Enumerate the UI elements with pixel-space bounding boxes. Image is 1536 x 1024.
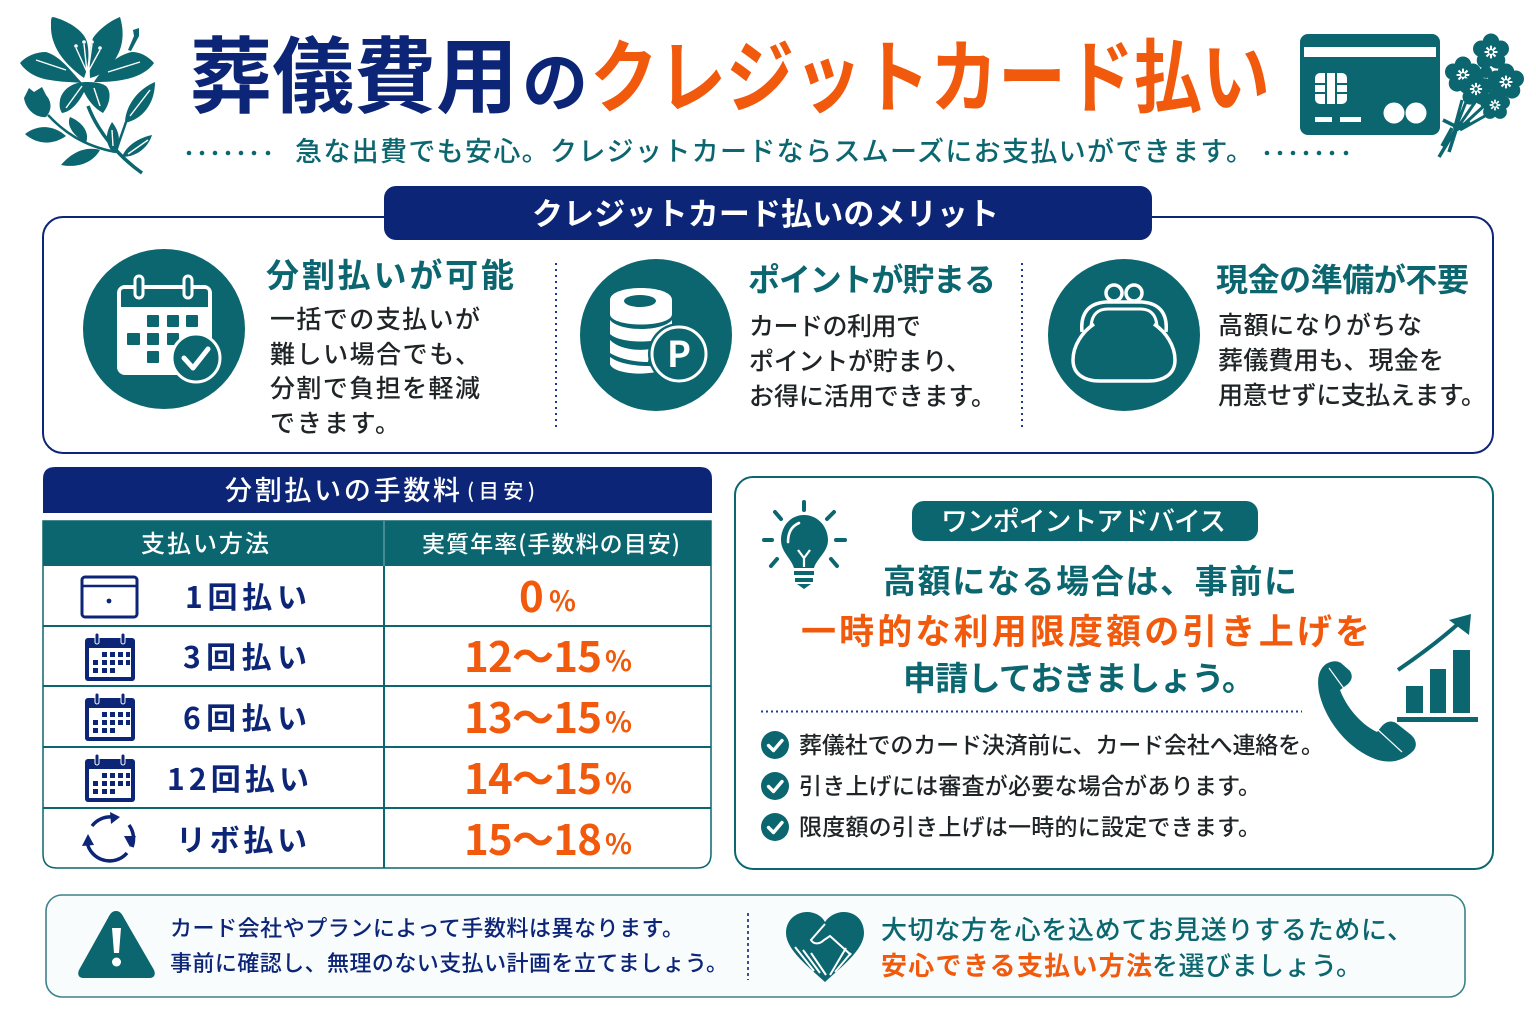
icon: coin purse <box>1048 259 1200 411</box>
text: no cash merit: 葬儀費用も、現金を <box>1218 341 1444 377</box>
text: points merit: カードの利用で <box>749 307 921 343</box>
row: revolving: 15～18 <box>464 807 602 868</box>
text: no cash merit: 用意せずに支払えます。 <box>1218 376 1486 412</box>
text: advice headline: 一時的な利用限度額の引き上げを <box>801 604 1370 655</box>
row: 12 payments: 14～15 <box>464 746 602 807</box>
row: revolving: % <box>605 823 632 863</box>
row: revolving <box>82 807 632 868</box>
checklist <box>761 726 1324 842</box>
text: closing message: を選びましょう。 <box>1152 946 1362 983</box>
row: 6 payments: 13～15 <box>464 685 602 746</box>
text: points merit: ポイントが貯まり、 <box>749 342 971 378</box>
row: 3 payments: % <box>605 640 632 680</box>
title: クレジットカード払い <box>590 14 1270 130</box>
text: points merit <box>748 255 996 413</box>
subtitle: 急な出費でも安心。クレジットカードならスムーズにお支払いができます。 <box>295 130 1253 169</box>
row: 1 payment: 0 <box>519 564 544 625</box>
text: fee note: 事前に確認し、無理のない支払い計画を立てましょう。 <box>170 946 728 978</box>
text: no cash merit <box>1216 255 1486 412</box>
row: 6 payments: % <box>605 701 632 741</box>
row: 6 payments <box>85 685 632 746</box>
text: advice headline: 申請しておきましょう。 <box>903 652 1255 700</box>
row: 12 payments: 12回払い <box>167 755 309 799</box>
icon: lily flower <box>20 17 155 173</box>
text: no cash merit: 高額になりがちな <box>1218 306 1422 342</box>
icon: light bulb <box>764 502 845 589</box>
text: installment merit: 分割払いが可能 <box>266 249 514 297</box>
text: installment merit <box>266 249 514 440</box>
row: 6 payments: 6回払い <box>183 694 307 738</box>
icon: bouquet <box>1439 33 1524 157</box>
checklist: 引き上げには審査が必要な場合があります。 <box>799 767 1261 801</box>
checklist: 限度額の引き上げは一時的に設定できます。 <box>799 808 1261 842</box>
heading: merits <box>384 186 1152 240</box>
text: installment merit: 分割で負担を軽減 <box>270 369 480 405</box>
text: closing message: 大切な方を心を込めてお見送りするために、 <box>881 910 1413 947</box>
icon: heart handshake <box>786 912 864 982</box>
panel: merits <box>43 186 1493 453</box>
row: 1 payment: 1回払い <box>185 573 307 617</box>
icon: phone and rising chart <box>1318 614 1478 762</box>
table header labels <box>141 524 680 559</box>
text: closing message: 安心できる支払い方法 <box>881 946 1152 983</box>
checklist: 葬儀社でのカード決済前に、カード会社へ連絡を。 <box>799 726 1324 760</box>
row: 12 payments: % <box>605 762 632 802</box>
text: closing message <box>881 910 1413 983</box>
title: 葬儀費用 <box>190 10 518 130</box>
text: installment merit: できます。 <box>270 404 400 440</box>
title <box>190 10 1270 130</box>
icon: warning triangle <box>78 911 155 978</box>
row: 3 payments <box>85 624 632 685</box>
row: revolving: リボ払い <box>176 816 307 860</box>
heading: fee table <box>43 467 712 513</box>
text: fee note: カード会社やプランによって手数料は異なります。 <box>170 911 684 943</box>
text: installment merit: 難しい場合でも、 <box>270 335 480 371</box>
panel: bottom notes <box>46 895 1465 997</box>
text: advice headline <box>801 555 1370 700</box>
panel: fee table <box>43 521 711 868</box>
table header labels: 実質年率(手数料の目安) <box>422 525 680 559</box>
row: 3 payments: 12～15 <box>464 624 602 685</box>
icon: point coins: P <box>667 326 691 378</box>
text: points merit: ポイントが貯まる <box>748 255 996 301</box>
panel: advice <box>735 477 1493 869</box>
text: no cash merit: 現金の準備が不要 <box>1216 255 1469 301</box>
badge: one point advice: ワンポイントアドバイス <box>941 500 1226 539</box>
row: 1 payment: % <box>549 580 576 620</box>
text: advice headline: 高額になる場合は、事前に <box>883 555 1297 603</box>
row: 1 payment <box>82 564 576 625</box>
heading: fee table: (目安) <box>467 475 535 504</box>
heading: merits: クレジットカード払いのメリット <box>532 189 999 234</box>
row: 3 payments: 3回払い <box>183 633 307 677</box>
heading: fee table: 分割払いの手数料 <box>225 469 460 508</box>
text: fee note <box>170 911 728 978</box>
icon: credit card <box>1300 34 1440 135</box>
text: points merit: お得に活用できます。 <box>749 377 996 413</box>
icon: calendar check <box>83 249 245 409</box>
table header labels: 支払い方法 <box>141 524 269 559</box>
row: 12 payments <box>85 746 632 807</box>
icon: point coins <box>580 259 732 411</box>
text: installment merit: 一括での支払いが <box>270 300 480 336</box>
title: の <box>522 30 588 126</box>
